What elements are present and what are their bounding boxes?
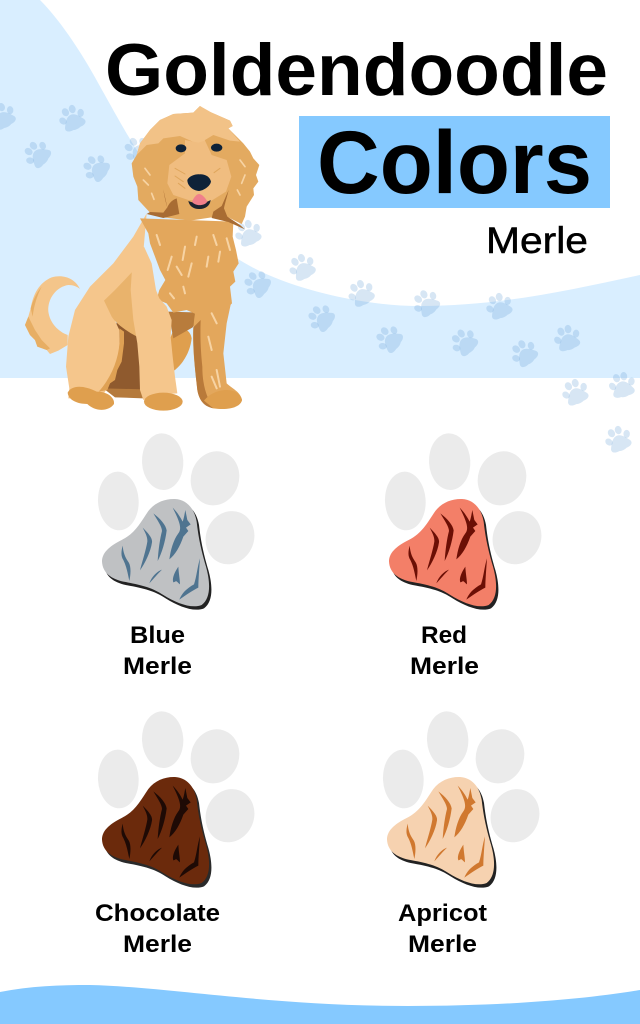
fur highlights on head bbox=[143, 160, 245, 199]
label: Red Merle bbox=[410, 622, 479, 680]
label: Apricot Merle: Apricot bbox=[398, 900, 487, 927]
background: light blue wave bbox=[0, 0, 640, 378]
tongue bbox=[192, 194, 207, 205]
far hind leg and belly shadow bbox=[103, 312, 202, 398]
dog head bbox=[132, 106, 259, 229]
dog tail bbox=[25, 276, 80, 354]
head silhouette bbox=[132, 106, 259, 224]
subtitle: Merle: Merle bbox=[486, 220, 588, 261]
chest fur highlights bbox=[157, 235, 230, 388]
paw: apricot merle bbox=[381, 710, 547, 888]
eyes bbox=[176, 144, 222, 152]
dog chest fur bbox=[140, 218, 239, 316]
bottom blue wave bbox=[0, 985, 640, 1024]
dog body, hip and back bbox=[66, 213, 147, 398]
label: Chocolate Merle: Chocolate bbox=[95, 900, 220, 927]
label: Apricot Merle: Merle bbox=[408, 931, 477, 958]
nose bbox=[187, 174, 211, 191]
label: Blue Merle: Blue bbox=[130, 622, 185, 649]
paw: red merle bbox=[383, 432, 549, 610]
label: Apricot Merle bbox=[398, 900, 487, 958]
label: Chocolate Merle: Merle bbox=[123, 931, 192, 958]
paw: chocolate merle bbox=[96, 710, 262, 888]
face light patch bbox=[167, 140, 231, 202]
title highlight: Colors: Colors bbox=[317, 112, 592, 212]
paw: blue merle bbox=[96, 432, 262, 610]
label: Chocolate Merle bbox=[95, 900, 220, 958]
dog paws bbox=[68, 387, 242, 411]
dog near front leg, right side bbox=[193, 300, 242, 409]
scattered small paw prints bbox=[0, 98, 639, 456]
illustration: goldendoodle dog bbox=[25, 106, 259, 411]
dog front leg, light bbox=[131, 247, 177, 400]
mouth bbox=[188, 200, 211, 209]
label: Red Merle: Merle bbox=[410, 653, 479, 680]
label: Red Merle: Red bbox=[421, 622, 467, 649]
forehead light fur bbox=[137, 106, 240, 155]
dark fur under ears bbox=[147, 189, 245, 229]
label: Blue Merle bbox=[123, 622, 192, 680]
title: Goldendoodle: Goldendoodle bbox=[105, 30, 608, 111]
label: Blue Merle: Merle bbox=[123, 653, 192, 680]
